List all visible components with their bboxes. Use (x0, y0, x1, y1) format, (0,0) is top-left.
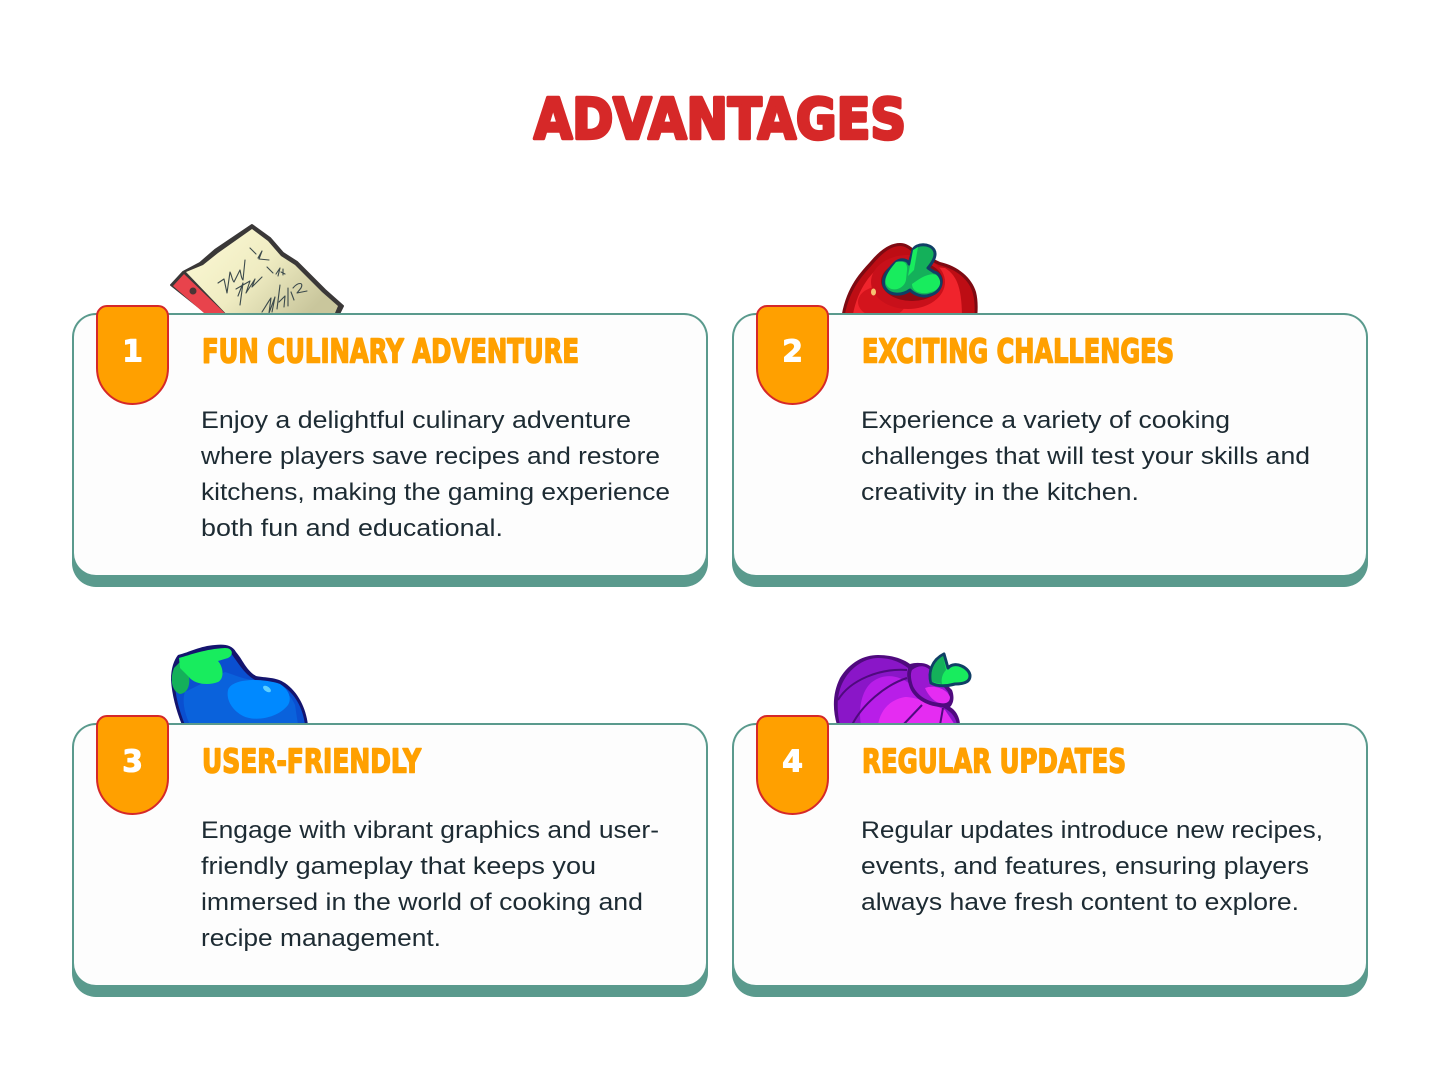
body text 4: always have fresh content to explore. (861, 889, 1299, 916)
body text 2: challenges that will test your skills and (861, 443, 1310, 470)
body text 3 (201, 817, 659, 952)
body text 3: Engage with vibrant graphics and user- (201, 817, 659, 844)
icon: red tomato (841, 243, 978, 320)
body text 3: friendly gameplay that keeps you (201, 853, 596, 880)
heading 4: REGULAR UPDATES (862, 742, 1126, 780)
number badge 4: 4 (782, 744, 803, 780)
heading 3: USER-FRIENDLY (202, 742, 422, 780)
number badge 4 (757, 716, 828, 814)
heading 1: FUN CULINARY ADVENTURE (202, 332, 579, 370)
number badge 1: 1 (122, 334, 143, 370)
number badge 3 (97, 716, 168, 814)
body text 4: Regular updates introduce new recipes, (861, 817, 1323, 844)
number badge 1 (97, 306, 168, 404)
heading 2: EXCITING CHALLENGES (862, 332, 1174, 370)
number badge 2: 2 (782, 334, 803, 370)
number badge 2 (757, 306, 828, 404)
body text 2: Experience a variety of cooking (861, 407, 1230, 434)
body text 1: kitchens, making the gaming experience (201, 479, 670, 506)
icon: recipe notebook (171, 225, 343, 320)
number badge 3: 3 (122, 744, 143, 780)
body text 1: both fun and educational. (201, 515, 503, 542)
body text 4: events, and features, ensuring players (861, 853, 1309, 880)
panel: fun culinary adventure (72, 306, 708, 587)
icon: purple onion (834, 654, 970, 725)
icon: blue eggplant (171, 645, 308, 725)
title: ADVANTAGES (534, 88, 906, 152)
body text 1: where players save recipes and restore (200, 443, 660, 470)
body text 3: immersed in the world of cooking and (201, 889, 643, 916)
body text 1 (200, 407, 670, 542)
panel: exciting challenges (732, 306, 1368, 587)
body text 3: recipe management. (201, 925, 441, 952)
body text 2: creativity in the kitchen. (861, 479, 1139, 506)
panel: user-friendly (72, 716, 708, 997)
body text 4 (861, 817, 1323, 916)
body text 2 (861, 407, 1310, 506)
body text 1: Enjoy a delightful culinary adventure (201, 407, 631, 434)
panel: regular updates (732, 716, 1368, 997)
